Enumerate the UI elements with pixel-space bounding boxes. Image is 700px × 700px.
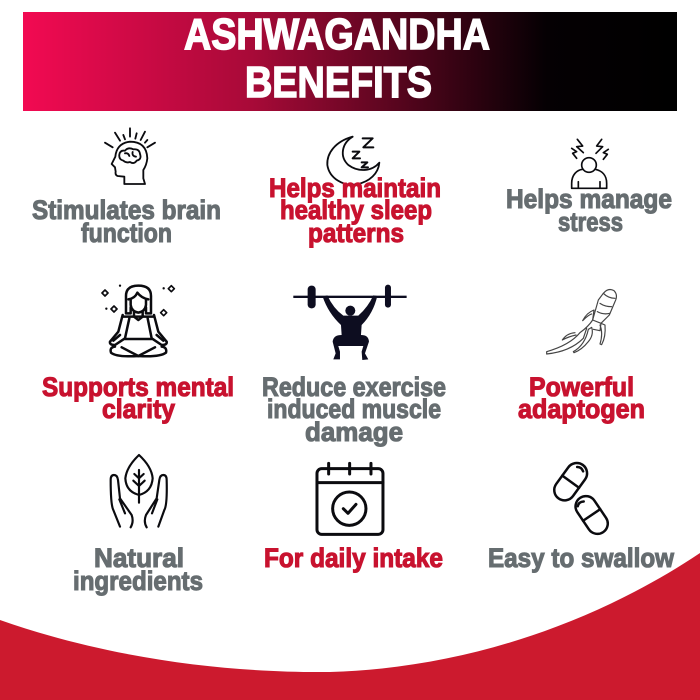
text: easy to swallow: Easy to swallow xyxy=(488,543,675,573)
icon: hands holding leaf xyxy=(111,455,167,527)
icon: capsules xyxy=(550,459,612,538)
header banner xyxy=(23,10,677,111)
text: supports mental clarity xyxy=(42,372,234,424)
text: reduce exercise induced muscle damage xyxy=(262,372,446,447)
text: powerful adaptogen: Powerful xyxy=(529,372,634,402)
title xyxy=(184,10,490,107)
text: reduce exercise induced muscle damage: damage xyxy=(305,417,403,447)
icon: moon with zzz xyxy=(327,137,379,185)
text: helps maintain healthy sleep patterns: healthy sleep xyxy=(280,195,432,225)
icon: meditating woman xyxy=(102,286,174,356)
icon: calendar with check xyxy=(317,463,383,534)
title: BENEFITS xyxy=(245,58,432,107)
bottom red curved band xyxy=(0,553,700,700)
text: stimulates brain function: Stimulates brain xyxy=(32,195,221,225)
text: natural ingredients: ingredients xyxy=(73,566,203,596)
text: powerful adaptogen: adaptogen xyxy=(518,394,645,424)
text: natural ingredients: Natural xyxy=(94,543,184,573)
text: for daily intake: For daily intake xyxy=(264,543,443,573)
text: stimulates brain function xyxy=(32,195,221,248)
icon: ashwagandha root xyxy=(547,289,616,354)
icon: weightlifter xyxy=(293,285,407,360)
text: powerful adaptogen xyxy=(518,372,645,424)
text: helps manage stress: stress xyxy=(558,207,623,237)
text: helps manage stress xyxy=(506,184,672,237)
icon: stressed person xyxy=(572,139,608,188)
text: supports mental clarity: Supports mental xyxy=(42,372,234,402)
text: helps maintain healthy sleep patterns xyxy=(269,173,441,248)
icon: head with brain xyxy=(105,128,155,184)
text: helps manage stress: Helps manage xyxy=(506,184,672,214)
title: ASHWAGANDHA xyxy=(184,10,490,59)
text: supports mental clarity: clarity xyxy=(102,394,175,424)
text: reduce exercise induced muscle damage: induced muscle xyxy=(267,394,441,424)
text: reduce exercise induced muscle damage: Reduce exercise xyxy=(262,372,446,402)
text: helps maintain healthy sleep patterns: patterns xyxy=(308,218,404,248)
text: helps maintain healthy sleep patterns: Helps maintain xyxy=(269,173,441,203)
text: natural ingredients xyxy=(73,543,203,596)
text: stimulates brain function: function xyxy=(81,218,172,248)
